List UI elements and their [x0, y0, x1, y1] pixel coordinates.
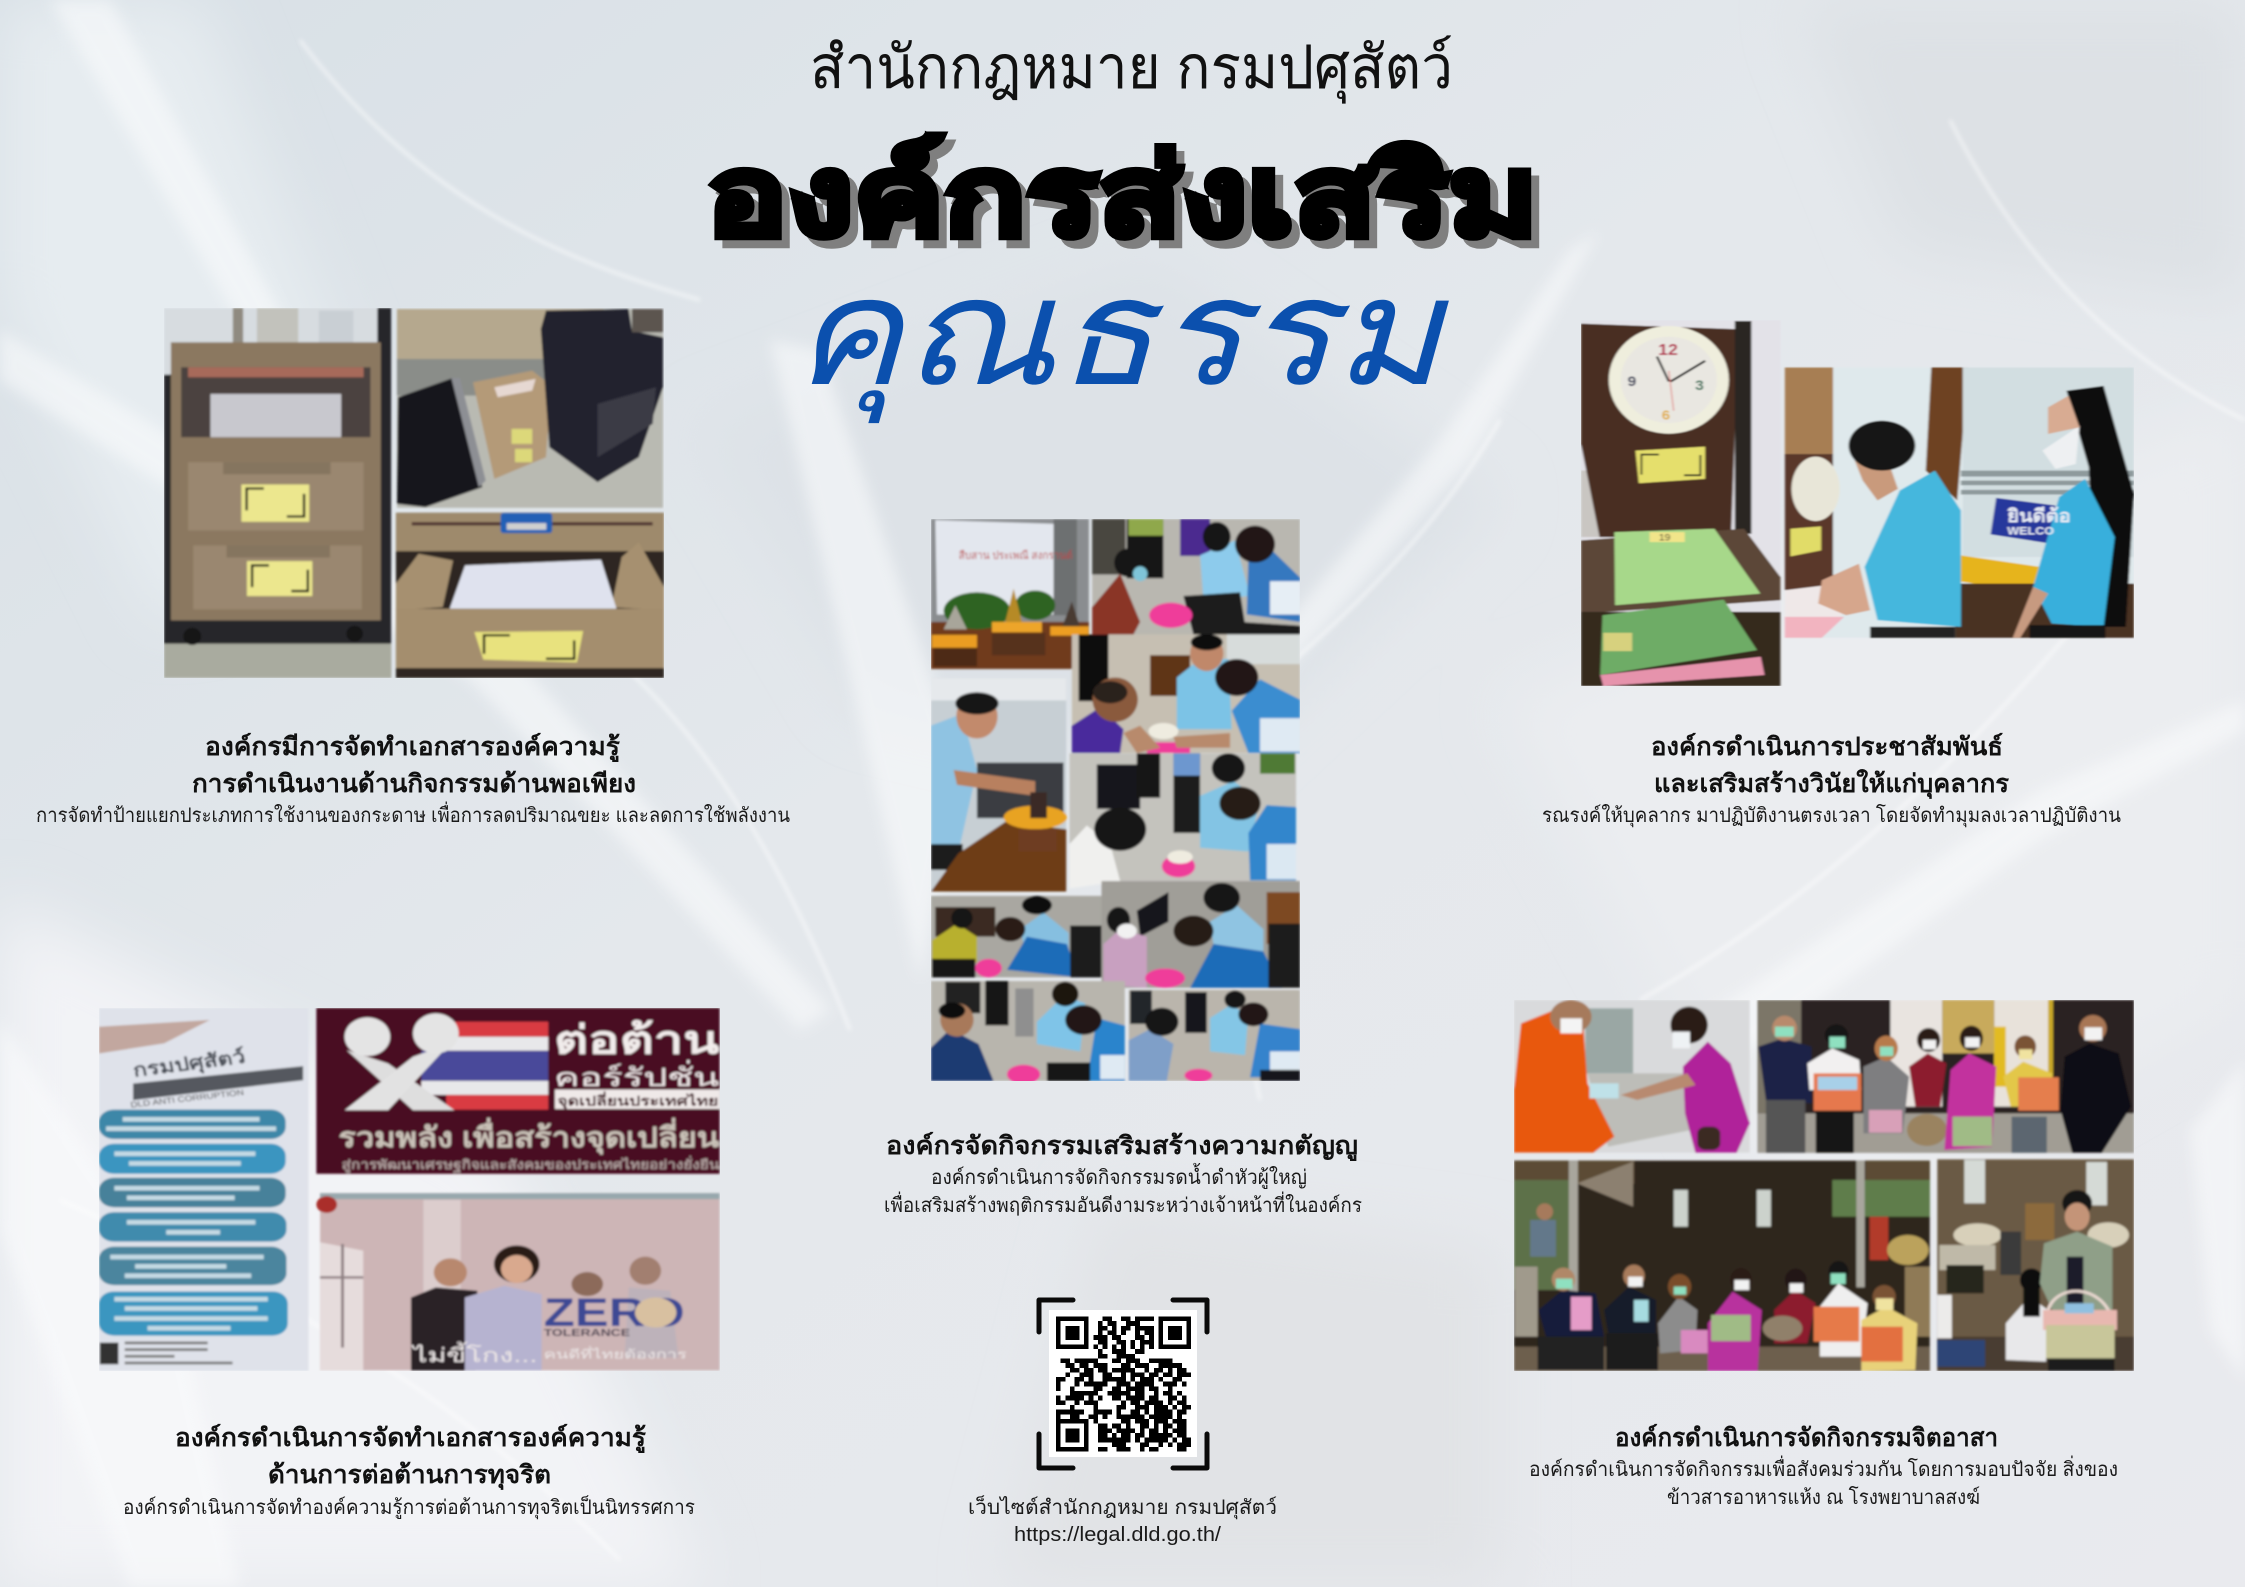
website caption under QR code: เว็บไซต์สำนักกฎหมาย กรมปศุสัตว์ — [968, 1494, 1277, 1520]
photo: man in blue shirt pays respect — [931, 981, 1125, 1084]
photo: anti-corruption banner: จุดเปลี่ยนประเทศไทย — [557, 1091, 718, 1110]
photo: clock and sign-in folders: 12 — [1658, 341, 1678, 359]
subtitle: สำนักกฎหมาย กรมปศุสัตว์ — [810, 34, 1453, 104]
photo: clock and sign-in folders: 19 — [1659, 533, 1671, 543]
photo: shredder, cabinet and printer — [397, 309, 663, 508]
photo: open drawer with paper — [396, 513, 664, 678]
photo: group with gifts in front of portrait — [1758, 1000, 2134, 1153]
caption: gratitude activity — [884, 1131, 1362, 1217]
caption: gratitude activity: องค์กรดำเนินการจัดกิจกรรมรดน้ำดำหัวผู้ใหญ่ — [931, 1163, 1307, 1190]
photo: DLD anti corruption poster: DLD ANTI CORRUPTION — [130, 1088, 245, 1109]
main title: องค์กรส่งเสริม — [706, 134, 1538, 259]
caption: volunteer activity: องค์กรดำเนินการจัดกิจกรรมจิตอาสา — [1615, 1423, 1998, 1452]
photo: clock and sign-in folders: 6 — [1662, 407, 1670, 422]
panel: gratitude ceremony photo collage — [931, 519, 1300, 1081]
photo: zero tolerance poster: ZERO — [544, 1291, 685, 1335]
photo: DLD anti corruption poster: กรมปศุสัตว์ — [131, 1045, 248, 1083]
photo: cabinet with two drawers — [164, 308, 391, 678]
photo: zero tolerance poster — [316, 1193, 720, 1370]
photo: man in white polo pays respect — [1070, 753, 1296, 888]
photo: altar with Buddha images — [931, 519, 1089, 669]
photo: clock and sign-in folders — [1581, 320, 1780, 686]
photo: monk receives masks — [1514, 1000, 1750, 1153]
photo: anti-corruption banner: สู่การพัฒนาเศรษฐกิจและสังคมของประเทศไทยอย่างยั่งยืน — [342, 1155, 719, 1174]
handwritten title: คุณธรรม — [792, 248, 1450, 424]
caption: anti-corruption documents: ด้านการต่อต้านการทุจริต — [268, 1461, 551, 1491]
caption: public relations and discipline — [1542, 732, 2121, 828]
photo: man in plaid shirt pays respect — [1129, 990, 1300, 1082]
caption: volunteer activity — [1529, 1423, 2118, 1509]
main title: องค์กรส่งเสริม — [714, 142, 1546, 267]
photo: staff signing in: WELCO — [2007, 524, 2054, 537]
photo: anti-corruption banner — [316, 1008, 720, 1174]
photo: woman in patterned shirt — [931, 896, 1102, 977]
caption: anti-corruption documents: องค์กรดำเนินการจัดทำเอกสารองค์ความรู้ — [175, 1423, 647, 1454]
caption: public relations and discipline: องค์กรดำเนินการประชาสัมพันธ์ — [1651, 732, 2003, 761]
caption: gratitude activity: เพื่อเสริมสร้างพฤติกรรมอันดีงามระหว่างเจ้าหน้าที่ในองค์กร — [884, 1191, 1362, 1217]
panel: document sorting photos — [164, 308, 664, 678]
caption: document sorting — [36, 732, 790, 827]
photo: clock and sign-in folders: 3 — [1695, 378, 1704, 394]
caption: public relations and discipline: และเสริมสร้างวินัยให้แก่บุคลากร — [1654, 768, 2010, 800]
caption: gratitude activity: องค์กรจัดกิจกรรมเสริมสร้างความกตัญญู — [886, 1131, 1358, 1162]
photo: DLD anti corruption poster — [99, 1008, 308, 1371]
website caption under QR code — [968, 1494, 1277, 1546]
caption: anti-corruption documents — [123, 1423, 695, 1520]
photo: group seated at shrine — [1514, 1161, 1930, 1371]
photo: zero tolerance poster: TOLERANCE — [544, 1328, 631, 1339]
photo: anti-corruption banner: ต่อต้าน — [554, 1019, 719, 1062]
photo: man pours water at altar — [931, 678, 1067, 891]
caption: document sorting: องค์กรมีการจัดทำเอกสารองค์ความรู้ — [205, 732, 621, 763]
photo: woman with gift basket at shrine — [1937, 1159, 2134, 1371]
QR code with corner brackets — [1036, 1298, 1210, 1470]
photo: woman with white mask — [1102, 881, 1300, 988]
panel: time attendance photos — [1581, 320, 2134, 686]
website caption under QR code: https://legal.dld.go.th/ — [1014, 1524, 1221, 1546]
photo: anti-corruption banner: คอร์รัปชั่น — [554, 1060, 719, 1092]
caption: public relations and discipline: รณรงค์ให้บุคลากร มาปฏิบัติงานตรงเวลา โดยจัดทำมุมลงเวลาปฏิบัติงาน — [1542, 804, 2121, 828]
photo: zero tolerance poster: ไม่ขี้โกง... — [410, 1342, 537, 1366]
photo: staff signing in — [1785, 368, 2134, 638]
photo: clock and sign-in folders: 9 — [1628, 375, 1636, 390]
photo: zero tolerance poster: คนดีที่ไทยต้องการ — [544, 1346, 687, 1361]
caption: volunteer activity: ข้าวสารอาหารแห้ง ณ โรงพยาบาลสงฆ์ — [1667, 1486, 1980, 1509]
photo: man pays respect, purple shirt — [1072, 634, 1300, 753]
caption: document sorting: การจัดทำป้ายแยกประเภทการใช้งานของกระดาษ เพื่อการลดปริมาณขยะ และลดการใช้พลังงาน — [36, 801, 790, 827]
photo: woman pays respect with basin — [1092, 519, 1300, 635]
panel: volunteer activity photos — [1514, 1000, 2134, 1371]
photo: altar with Buddha images: สืบสาน ประเพณี สงกรานต์ — [959, 548, 1073, 562]
caption: anti-corruption documents: องค์กรดำเนินการจัดทำองค์ความรู้การต่อต้านการทุจริตเป็นนิทรรศการ — [123, 1494, 695, 1520]
caption: volunteer activity: องค์กรดำเนินการจัดกิจกรรมเพื่อสังคมร่วมกัน โดยการมอบปัจจัย สิ่งของ — [1529, 1455, 2118, 1481]
photo: staff signing in: ยินดีต้อ — [2007, 506, 2071, 527]
panel: anti-corruption posters — [99, 1008, 720, 1371]
caption: document sorting: การดำเนินงานด้านกิจกรรมด้านพอเพียง — [192, 770, 636, 798]
